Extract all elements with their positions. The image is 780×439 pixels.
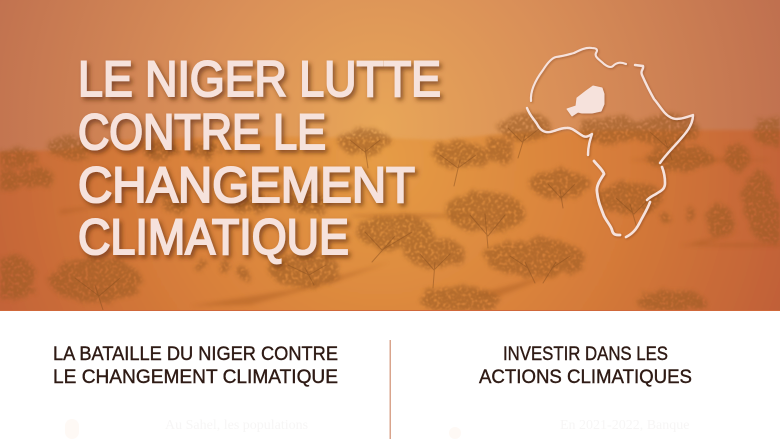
panel: white lower section [0,311,780,439]
title: LE NIGER LUTTE [78,51,441,107]
sand dunes ground [0,130,780,320]
heading: right column [479,343,692,388]
heading: right column: ACTIONS CLIMATIQUES [479,366,692,388]
faint faded text and icon: left column: Au Sahel, les populations [165,418,308,433]
faint faded text and icon: right column: En 2021-2022, Banque [560,418,689,433]
heading: left column: LE CHANGEMENT CLIMATIQUE [53,366,338,388]
acacia tree crowns [0,113,780,314]
heading: left column [53,343,338,388]
faint faded text and icon: right column [449,418,689,439]
title: CLIMATIQUE [78,209,349,265]
title: CHANGEMENT [78,157,415,213]
icon: map of Africa with Niger highlighted [527,48,693,237]
title: CONTRE LE [78,104,326,160]
heading: left column: LA BATAILLE DU NIGER CONTRE [53,343,338,365]
title [78,51,441,265]
orange base line of banner [0,310,780,311]
divider [390,340,391,439]
heading: right column: INVESTIR DANS LES [503,343,668,365]
dune shadows [60,158,780,306]
icon: Niger silhouette [567,86,604,116]
sky background [0,0,780,311]
tree trunks and branches [75,128,685,310]
faint faded text and icon: left column [65,418,308,439]
